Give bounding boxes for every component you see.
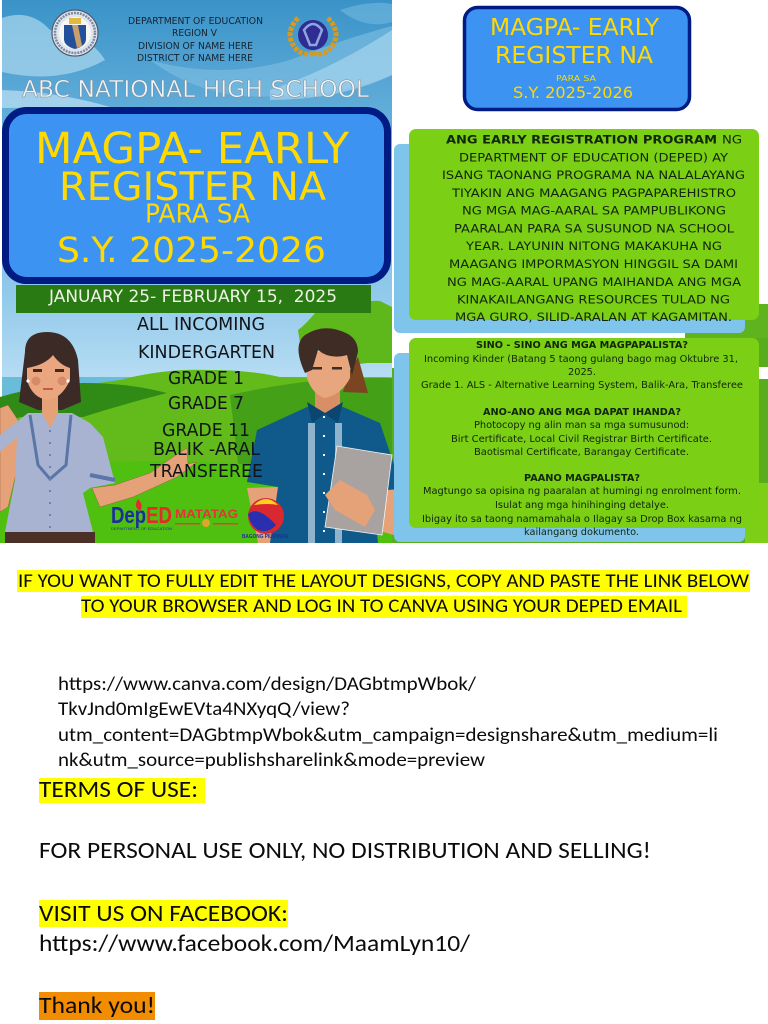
header: department text: DIVISION OF NAME HERE bbox=[138, 41, 253, 52]
panel: program description: NG bbox=[722, 132, 742, 146]
date banner: JANUARY 25- FEBRUARY 15, 2025 bbox=[48, 287, 337, 306]
audience list: GRADE 1 bbox=[168, 369, 244, 389]
terms of use bbox=[39, 776, 651, 865]
audience list: TRANSFEREE bbox=[149, 462, 263, 482]
details: who can register: 2025. bbox=[568, 367, 596, 378]
panel: program description: KINAKAILANGANG RESOURCES TULAD NG bbox=[457, 292, 730, 306]
icon: DepEd seal bbox=[52, 10, 98, 56]
terms of use: FOR PERSONAL USE ONLY, NO DISTRIBUTION AND SELLING! bbox=[39, 837, 651, 865]
audience list: GRADE 11 bbox=[162, 421, 250, 441]
panel: program description: MGA GURO, SILID-ARALAN AT KAGAMITAN. bbox=[455, 310, 732, 324]
thank you: Thank you! bbox=[39, 991, 155, 1020]
title panel: MAGPA- EARLY bbox=[35, 124, 350, 174]
details: how to register: Isulat ang mga hinihinging detalye. bbox=[495, 500, 669, 511]
logo: Bagong Pilipinas bbox=[242, 498, 289, 540]
canva link bbox=[58, 672, 718, 772]
logo: DepED: DEPARTMENT OF EDUCATION bbox=[111, 527, 173, 531]
header: department text: DEPARTMENT OF EDUCATION bbox=[128, 16, 263, 27]
logo: DepED: DepED bbox=[111, 502, 172, 528]
title panel bbox=[6, 110, 388, 280]
notice: edit instructions: TO YOUR BROWSER AND LOG IN TO CANVA USING YOUR DEPED EMAIL bbox=[81, 595, 682, 618]
small title panel: REGISTER NA bbox=[495, 43, 653, 69]
woman illustration bbox=[0, 332, 197, 543]
title panel: PARA SA bbox=[145, 200, 251, 230]
small title panel: S.Y. 2025-2026 bbox=[513, 83, 633, 102]
details: how to register: kailangang dokumento. bbox=[524, 527, 639, 538]
small title panel: PARA SA bbox=[556, 74, 597, 83]
panel: program description: YEAR. LAYUNIN NITONG MAKAKUHA NG bbox=[465, 239, 722, 253]
panel: program description: ISANG TAONANG PROGRAMA NA NALALAYANG bbox=[442, 168, 745, 182]
panel: program description: NG MGA MAG-AARAL SA PAMPUBLIKONG bbox=[462, 204, 726, 218]
details: what to prepare: Baotismal Certificate, Barangay Certificate. bbox=[474, 447, 689, 458]
panel: program description bbox=[394, 129, 759, 333]
date banner bbox=[16, 285, 371, 313]
panel: program description: NG MAG-AARAL UPANG MAIHANDA ANG MGA bbox=[447, 275, 741, 289]
logo: Matatag: MATATAG bbox=[175, 509, 238, 521]
small title panel bbox=[464, 8, 690, 110]
icon: school logo bbox=[290, 18, 336, 54]
canva link: utm_content=DAGbtmpWbok&utm_campaign=designshare&utm_medium=li bbox=[58, 723, 718, 747]
logo: Matatag bbox=[175, 509, 238, 527]
small title panel: MAGPA- EARLY bbox=[490, 15, 660, 41]
audience list: GRADE 7 bbox=[168, 394, 244, 414]
logo: Bagong Pilipinas: BAGONG PILIPINAS bbox=[242, 534, 289, 540]
details: how to register: Ibigay ito sa taong namamahala o Ilagay sa Drop Box kasama ng bbox=[422, 514, 742, 525]
audience list: BALIK -ARAL bbox=[153, 440, 260, 460]
notice: edit instructions bbox=[17, 570, 750, 618]
panel: program description: TIYAKIN ANG MAAGANG PAGPAPAREHISTRO bbox=[451, 186, 736, 200]
facebook link: VISIT US ON FACEBOOK: bbox=[39, 900, 288, 928]
details: what to prepare bbox=[451, 407, 712, 458]
details: how to register: Magtungo sa opisina ng paaralan at humingi ng enrolment form. bbox=[423, 486, 741, 497]
title panel: S.Y. 2025-2026 bbox=[57, 231, 326, 271]
details: who can register: Incoming Kinder (Batang 5 taong gulang bago mag Oktubre 31, bbox=[424, 354, 738, 365]
panel: program description: MAAGANG IMPORMASYON HINGGIL SA DAMI bbox=[449, 257, 738, 271]
details: what to prepare: Birt Certificate, Local Civil Registrar Birth Certificate. bbox=[451, 434, 712, 445]
canva link: TkvJnd0mIgEwEVta4NXyqQ/view? bbox=[58, 697, 350, 721]
details: who can register bbox=[421, 340, 743, 391]
audience list bbox=[137, 315, 275, 482]
header: department text bbox=[128, 16, 263, 64]
details: what to prepare: ANO-ANO ANG MGA DAPAT IHANDA? bbox=[483, 407, 681, 418]
notice: edit instructions: IF YOU WANT TO FULLY EDIT THE LAYOUT DESIGNS, COPY AND PASTE THE LINK BELOW bbox=[18, 570, 749, 593]
right background scenery bbox=[392, 0, 768, 543]
poster: left scene background bbox=[0, 0, 392, 543]
tree bbox=[298, 301, 392, 364]
panel: program description: PAARALAN PARA SA SUSUNOD NA SCHOOL bbox=[454, 222, 735, 236]
details: who can register: Grade 1. ALS - Alternative Learning System, Balik-Ara, Transferee bbox=[421, 380, 743, 391]
title panel: REGISTER NA bbox=[59, 165, 326, 210]
terms of use: TERMS OF USE: bbox=[39, 776, 198, 804]
header: department text: REGION V bbox=[172, 28, 218, 39]
details: who can register: SINO - SINO ANG MGA MAGPAPALISTA? bbox=[476, 340, 688, 351]
details: how to register bbox=[422, 473, 742, 538]
canva link: https://www.canva.com/design/DAGbtmpWbok/ bbox=[58, 672, 477, 696]
header: department text: DISTRICT OF NAME HERE bbox=[137, 53, 253, 64]
man illustration bbox=[247, 328, 408, 543]
details: what to prepare: Photocopy ng alin man sa mga sumusunod: bbox=[474, 420, 689, 431]
panel: program description: ANG EARLY REGISTRATION PROGRAM bbox=[446, 132, 717, 146]
facebook link bbox=[39, 900, 471, 958]
details: how to register: PAANO MAGPALISTA? bbox=[524, 473, 640, 484]
panel: registration details bbox=[394, 338, 759, 542]
school name: ABC NATIONAL HIGH SCHOOL bbox=[22, 77, 369, 103]
panel: program description: DEPARTMENT OF EDUCATION (DEPED) AY bbox=[459, 150, 729, 164]
canva link: nk&utm_source=publishsharelink&mode=preview bbox=[58, 748, 485, 772]
facebook link: https://www.facebook.com/MaamLyn10/ bbox=[39, 930, 471, 958]
audience list: KINDERGARTEN bbox=[138, 343, 275, 363]
audience list: ALL INCOMING bbox=[137, 315, 265, 335]
